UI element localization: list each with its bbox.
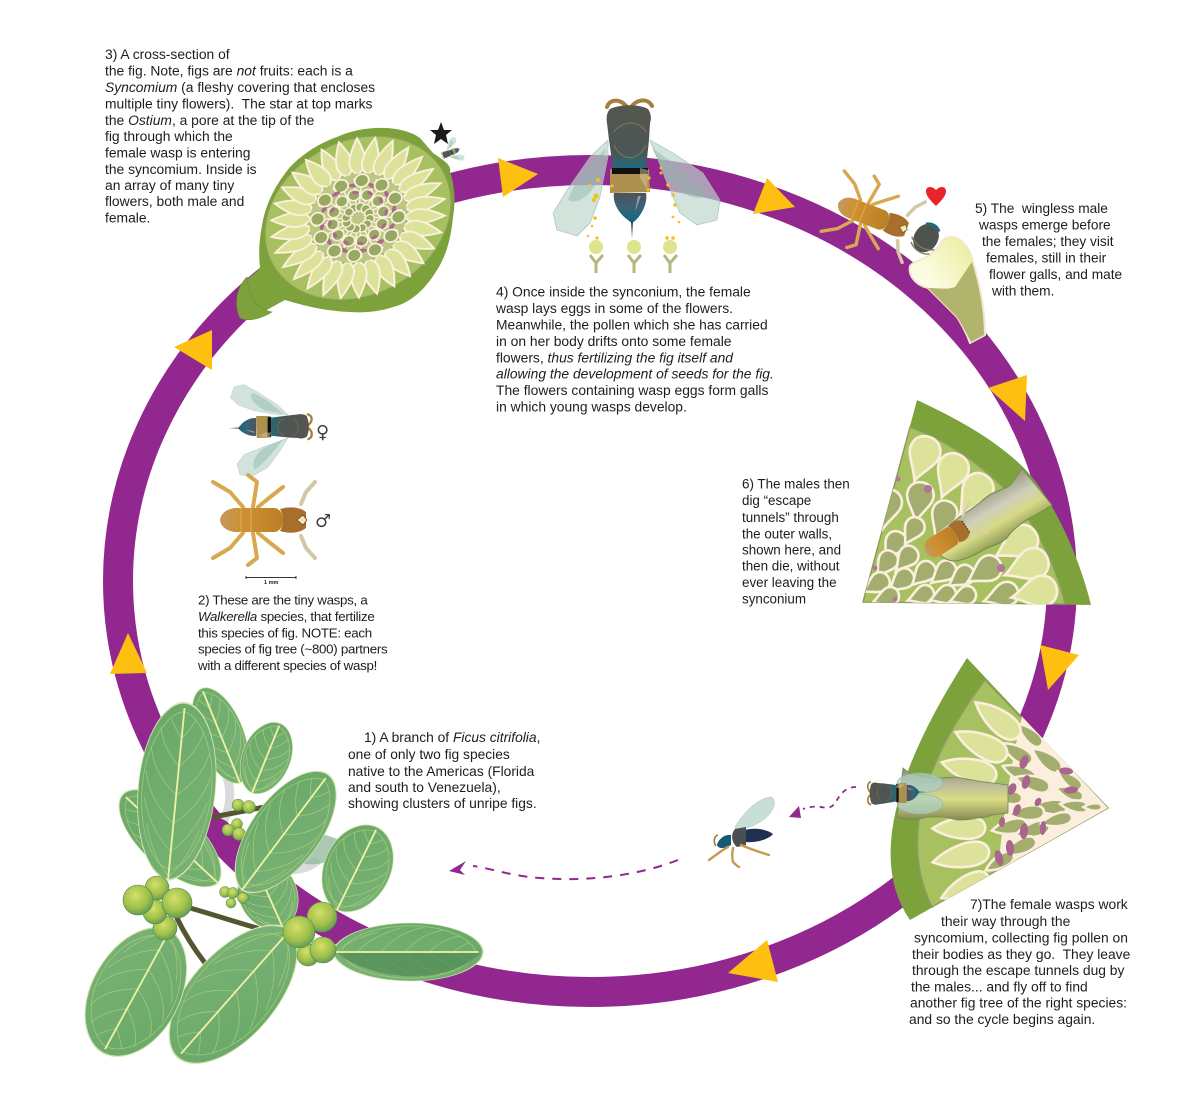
flowers	[214, 83, 502, 353]
flowers in wedge	[858, 432, 1060, 613]
faded leaf	[295, 830, 350, 864]
text: step 7: their way through the	[941, 913, 1071, 929]
icon: heart	[926, 187, 946, 206]
grey shadows	[222, 768, 318, 870]
text: step 3: fig through which the	[105, 128, 233, 144]
text: step 7: and so the cycle begins again.	[909, 1011, 1095, 1027]
small fig cluster upper	[222, 799, 256, 840]
text: step 3: the fig. Note, figs are not fruits: each is a	[105, 62, 353, 78]
wedge rind	[891, 658, 1108, 920]
flight path: long dashed arrow	[449, 860, 678, 879]
flight path: short dashed arrow	[789, 787, 856, 818]
text: step 7: another fig tree of the right species:	[910, 994, 1127, 1010]
text: step 5: females, still in their	[986, 250, 1107, 266]
icon: large female wasp	[553, 100, 720, 238]
arrow: toward step 6	[988, 375, 1027, 421]
text: step 6: ever leaving the	[742, 575, 837, 590]
text: step 5: the females; they visit	[982, 234, 1114, 249]
text: step 5: 5) The wingless male	[975, 201, 1108, 216]
text: step 3: female wasp is entering	[105, 144, 250, 160]
text: step 3: the Ostium, a pore at the tip of the	[105, 112, 314, 128]
panel: wasp species specimens	[213, 385, 331, 586]
symbol: female sign: ♀	[316, 422, 329, 443]
arrow: toward step 4	[498, 158, 538, 197]
icon: flower middle	[627, 240, 641, 273]
text: step 6: shown here, and	[742, 542, 841, 558]
icon: flower right	[663, 236, 677, 273]
text: step 6: then die, without	[742, 558, 840, 574]
icon: female wasp in gall	[907, 219, 945, 258]
leaves front	[64, 699, 483, 1086]
panel: female exit wedge	[868, 658, 1108, 920]
arrows on ring	[110, 158, 1079, 982]
wedge interior	[863, 427, 1065, 604]
panel: fig cross-section	[214, 83, 502, 353]
text: step 4: flowers, thus fertilizing the fig itself and	[496, 350, 733, 366]
panel: fig branch	[64, 680, 483, 1086]
scale bar	[246, 576, 296, 586]
panel: mating in gall	[819, 165, 985, 343]
panel: escape tunnel wedge (males)	[858, 400, 1091, 613]
icon: flower left	[589, 236, 603, 273]
escape tunnel	[935, 468, 1052, 561]
arrow: toward step 2	[110, 633, 147, 674]
small fig cluster lower	[220, 886, 248, 908]
text: step 1: 1) A branch of Ficus citrifolia,	[364, 730, 540, 745]
text: step 2: 2) These are the tiny wasps, a	[198, 592, 368, 608]
text: step 1: showing clusters of unripe figs.	[348, 796, 537, 811]
fig cluster left	[123, 876, 192, 940]
text: step 4: allowing the development of seeds for the fig.	[496, 366, 774, 382]
text: step 4: The flowers containing wasp eggs form galls	[496, 382, 768, 398]
wedge interior	[917, 680, 1108, 907]
text: step 3: multiple tiny flowers). The star at top marks	[105, 96, 373, 112]
fig interior	[236, 104, 480, 332]
arrow: toward step 7	[1040, 645, 1079, 690]
text: step 2: species of fig tree (~800) partners	[198, 642, 388, 656]
icon: female wasp in tunnel	[868, 773, 943, 814]
text: step 4: Meanwhile, the pollen which she has carried	[496, 316, 768, 332]
text: step 3: female.	[105, 210, 150, 226]
text: step 1: one of only two fig species	[348, 747, 510, 762]
branch stems	[177, 806, 270, 963]
text: step 1: and south to Venezuela),	[348, 780, 501, 795]
text: step 6: 6) The males then	[742, 476, 850, 492]
text: step 7: the males... and fly off to find	[911, 978, 1088, 994]
exit tunnel	[897, 768, 1008, 820]
text: step 3: 3) A cross-section of	[105, 46, 230, 62]
text: step 3: the syncomium. Inside is	[105, 161, 257, 177]
text: step 6: synconium	[742, 592, 806, 606]
text: step 3: an array of many tiny	[105, 177, 234, 193]
dark lower half of horizontal leaf	[337, 953, 480, 976]
text: step 5: with them.	[991, 284, 1054, 298]
panel: wasp laying eggs	[553, 100, 720, 273]
text: step 4: in which young wasps develop.	[496, 398, 687, 414]
bracts	[237, 277, 272, 320]
text: step 4: wasp lays eggs in some of the flowers.	[495, 300, 733, 316]
text: step 4: 4) Once inside the synconium, the female	[496, 284, 751, 300]
text: step 7: through the escape tunnels dug by	[912, 962, 1125, 978]
text: step 6: tunnels” through	[742, 510, 839, 525]
flower gall	[910, 237, 985, 343]
leaves behind	[103, 680, 309, 940]
arrow: toward step 5	[753, 178, 795, 214]
text: step 5: wasps emerge before	[978, 218, 1111, 232]
text: step 2: Walkerella species, that fertilize	[198, 609, 374, 624]
icon: male wasp in tunnel	[916, 502, 989, 567]
text: step 4: in on her body drifts onto some female	[496, 333, 732, 349]
text: step 6: the outer walls,	[742, 526, 832, 542]
icon: flying female wasp	[709, 797, 774, 867]
text: step 6: dig “escape	[742, 493, 811, 508]
icon: female wasp dorsal	[229, 385, 312, 476]
arrow: toward step 3	[174, 330, 212, 370]
life-cycle ring	[118, 170, 1062, 992]
wedge rind	[863, 400, 1091, 605]
pollen grains	[587, 166, 680, 237]
scale bar: 1 mm	[264, 580, 278, 586]
symbol: male sign: ♂	[315, 511, 331, 532]
icon: star marking ostium	[430, 122, 452, 144]
fig rind	[243, 128, 455, 320]
icon: wasp entering ostium	[438, 136, 466, 166]
text: step 7: their bodies as they go. They leave	[912, 946, 1131, 962]
text: step 2: with a different species of wasp!	[197, 658, 377, 673]
text: step 5: flower galls, and mate	[989, 267, 1122, 282]
flowers in wedge	[930, 694, 1108, 908]
fig cluster right	[283, 902, 337, 966]
text: step 7: syncomium, collecting fig pollen on	[914, 930, 1128, 946]
arrow: toward step 1	[728, 940, 778, 982]
text: step 7: 7)The female wasps work	[970, 896, 1128, 912]
icon: male wasp dorsal	[213, 475, 315, 565]
text: step 2: this species of fig. NOTE: each	[198, 626, 372, 640]
icon: male wasp	[819, 165, 927, 268]
text: step 3: Syncomium (a fleshy covering that encloses	[105, 79, 375, 95]
text: step 3: flowers, both male and	[105, 193, 244, 209]
text: step 1: native to the Americas (Florida	[348, 764, 535, 779]
